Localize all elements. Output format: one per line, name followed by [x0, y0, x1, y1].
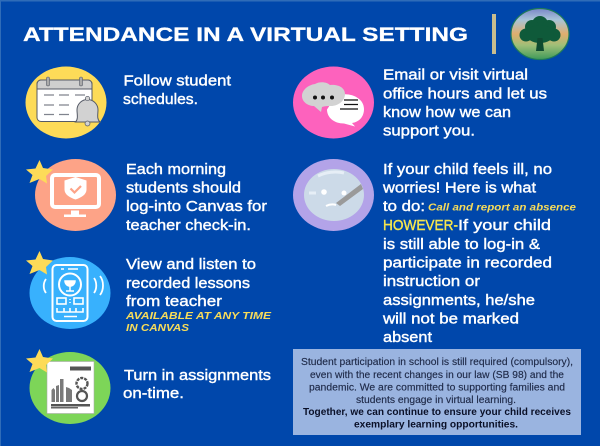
text: email or office hours: Email or visit virtual: [383, 66, 528, 84]
text: follow schedules: schedules.: [123, 91, 198, 108]
text: participation note: exemplary learning opportunities.: [354, 420, 518, 430]
text: participation note: even with the recent changes in our law (SB 98) and the: [310, 370, 564, 381]
text: participation note: [301, 357, 573, 430]
panel: follow schedules: [26, 66, 232, 138]
text: canvas check-in: teacher check-in.: [126, 217, 251, 234]
panel: recorded lessons: [26, 251, 272, 334]
panel: participation note: [293, 349, 581, 435]
text: child feels ill: If your child: [458, 217, 551, 234]
text: child feels ill: absent: [383, 329, 433, 346]
text: child feels ill: If your child feels ill, no: [383, 161, 552, 178]
panel: child feels ill: [293, 159, 576, 346]
text: participation note: students engage in virtual learning.: [356, 395, 516, 406]
divider: [492, 14, 496, 54]
icon: report sheet: [30, 352, 110, 424]
text: turn in assignments: on-time.: [123, 385, 184, 402]
text: recorded lessons: recorded lessons: [126, 275, 250, 292]
text: canvas check-in: Each morning: [126, 161, 226, 178]
icon: phone with microphone: [30, 257, 110, 329]
title: ATTENDANCE IN A VIRTUAL SETTING: [23, 24, 468, 46]
text: canvas check-in: [126, 161, 267, 234]
text: email or office hours: support you.: [383, 122, 475, 140]
text: email or office hours: know how we can: [383, 104, 511, 121]
panel: turn in assignments: [26, 349, 271, 424]
icon: star: [26, 251, 53, 274]
text: child feels ill: is still able to log-in &: [383, 236, 540, 253]
text: child feels ill: [382, 161, 576, 346]
text: participation note: Together, we can continue to ensure your child receives: [303, 407, 571, 418]
logo: oak tree seal: [511, 8, 569, 60]
panel: canvas check-in: [26, 159, 267, 234]
text: canvas check-in: students should: [126, 180, 241, 196]
icon: star: [26, 160, 53, 184]
text: turn in assignments: Turn in assignments: [124, 367, 271, 384]
text: child feels ill: Call and report an absence: [428, 202, 576, 214]
text: participation note: pandemic. We are committed to supporting families and: [309, 382, 565, 394]
text: child feels ill: instruction or: [383, 273, 480, 290]
text: turn in assignments: [123, 367, 271, 402]
text: child feels ill: worries! Here is what: [382, 180, 537, 196]
text: recorded lessons: from teacher: [126, 293, 222, 310]
icon: speech bubbles: [293, 66, 374, 138]
text: child feels ill: participate in recorded: [383, 254, 552, 272]
callout: available in canvas: IN CANVAS: [126, 322, 189, 334]
text: child feels ill: assignments, he/she: [383, 292, 535, 309]
panel: email or office hours: [293, 66, 547, 140]
text: child feels ill: to do:: [383, 198, 425, 215]
text: canvas check-in: log-into Canvas for: [126, 198, 267, 215]
text: email or office hours: [383, 66, 547, 140]
text: recorded lessons: [126, 256, 256, 310]
text: recorded lessons: View and listen to: [126, 256, 256, 273]
callout: available in canvas: AVAILABLE AT ANY TIME: [125, 310, 272, 322]
icon: monitor with shield: [35, 159, 116, 231]
text: email or office hours: office hours and let us: [383, 86, 547, 102]
icon: sick face with thermometer: [293, 159, 374, 231]
text: child feels ill: HOWEVER-: [383, 217, 458, 234]
text: participation note: Student participation in school is still required (compulsory),: [301, 357, 573, 368]
icon: calendar and bell: [26, 66, 106, 138]
text: child feels ill: will not be marked: [382, 310, 519, 328]
icon: star: [26, 349, 53, 372]
text: follow schedules: [123, 72, 232, 108]
callout: available in canvas: [125, 310, 272, 334]
text: follow schedules: Follow student: [124, 72, 232, 90]
